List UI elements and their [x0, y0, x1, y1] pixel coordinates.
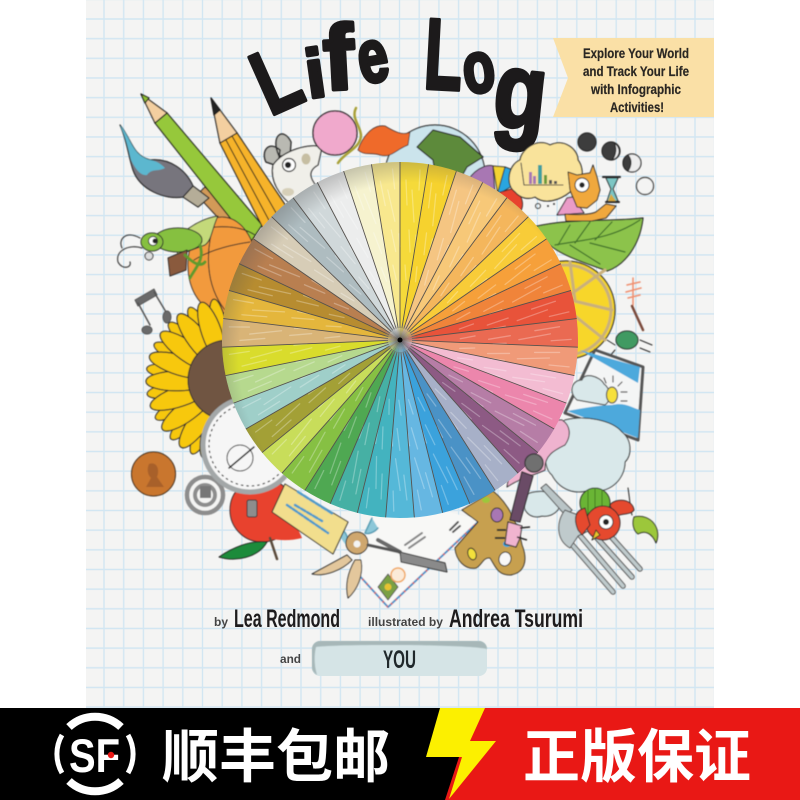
- title: f: [321, 6, 357, 110]
- icon: pushpin key: [312, 518, 400, 598]
- icon: llama: [264, 134, 322, 208]
- icon: SF logo: [57, 717, 133, 791]
- icon: moon phases: [578, 133, 654, 194]
- text: free shipping: 顺丰包邮: [162, 725, 390, 790]
- title: L: [237, 25, 315, 134]
- icon: pink cloud: [507, 420, 569, 487]
- icon: orange critter: [358, 126, 410, 156]
- author credits: illustrated by: [368, 615, 443, 629]
- icon: yellow pencil: [211, 98, 290, 232]
- icon: apple: [219, 478, 302, 559]
- author credits: by: [214, 615, 228, 629]
- icon: beetle: [607, 331, 652, 356]
- icon: leaf: [533, 218, 643, 271]
- icon: SF logo: SF: [69, 729, 120, 782]
- icon: violin: [495, 454, 543, 547]
- icon: cat with hourglass: [557, 165, 620, 221]
- title: L: [422, 0, 466, 112]
- icon: pumpkin: [188, 217, 256, 313]
- icon: stopwatch: [187, 398, 297, 513]
- icon: handwritten tag: [272, 484, 348, 554]
- illustrations behind the wheel: [118, 94, 658, 607]
- icon: penny: [132, 452, 176, 496]
- icon: blue clouds: [524, 418, 630, 517]
- graph paper background: [86, 0, 714, 708]
- author credits: [214, 605, 583, 633]
- icon: grasshopper: [118, 216, 218, 278]
- title: o: [457, 26, 500, 110]
- tagline ribbon: with Infographic: [590, 81, 681, 97]
- author credits: Andrea Tsurumi: [449, 605, 583, 633]
- name field: [280, 641, 487, 676]
- name field: and: [280, 652, 301, 666]
- icon: thought cloud with bars: [509, 143, 582, 208]
- icon: painter palette: [455, 491, 525, 575]
- icon: green pencil: [141, 94, 262, 243]
- icon: lemon slice: [517, 261, 615, 359]
- icon: music notes: [135, 289, 171, 334]
- chart: mini pie: [468, 166, 522, 212]
- text: genuine guarantee: 正版保证: [523, 725, 751, 790]
- icon: paint brush: [120, 125, 262, 252]
- icon: feather twig: [626, 278, 643, 330]
- icon: fork: [541, 484, 640, 592]
- tagline ribbon: [553, 38, 714, 117]
- icon: sunflower: [146, 298, 268, 462]
- icon: lightning bolt: [426, 708, 496, 799]
- icon: airmail envelope: [358, 510, 480, 607]
- icon: red and green bird: [576, 488, 658, 543]
- tagline ribbon: and Track Your Life: [583, 63, 689, 79]
- wedges: [220, 160, 580, 520]
- title: e: [350, 12, 394, 100]
- icon: globe: [385, 125, 485, 225]
- author credits: Lea Redmond: [234, 605, 340, 633]
- bottom promo banner: [0, 708, 800, 800]
- icon: open laptop: [565, 350, 643, 440]
- title: i: [301, 35, 330, 113]
- name field: YOU: [383, 646, 416, 674]
- icon: bubble gum: [313, 108, 361, 163]
- tagline ribbon: Activities!: [610, 99, 664, 115]
- title: [237, 0, 553, 154]
- color wheel chart: [220, 160, 580, 520]
- tagline ribbon: Explore Your World: [583, 45, 689, 61]
- title: g: [489, 28, 553, 154]
